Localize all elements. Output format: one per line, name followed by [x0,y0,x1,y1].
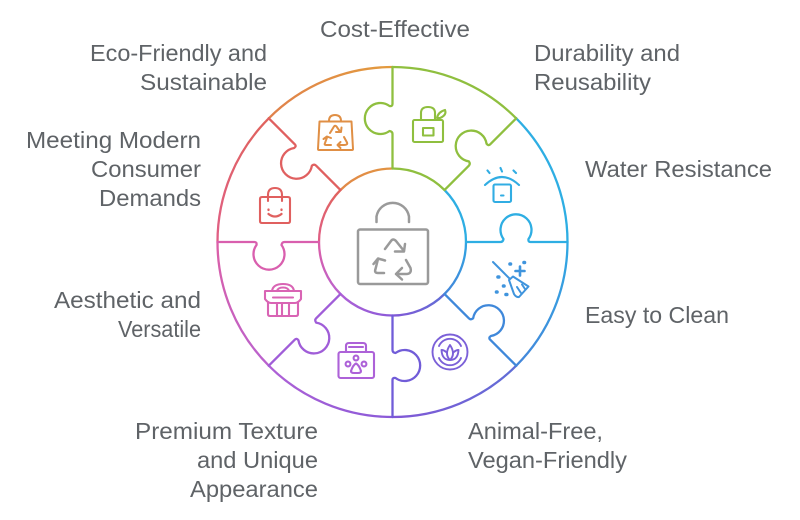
inner arc: premium texture piece [340,294,392,316]
label: meeting modern consumer demands: Consumer [91,156,201,182]
label: eco-friendly and sustainable: Eco-Friendly and [90,40,267,66]
outer arc: modern consumer piece [218,118,269,242]
icon: central recycling padlock bag [358,203,428,284]
label: water resistance: Water Resistance [585,156,772,182]
label: animal-free, vegan-friendly: Animal-Free, [468,418,603,444]
outer arc: aesthetic piece [218,242,269,366]
label: premium texture and unique appearance: Appearance [190,476,318,502]
outer and inner arc: water resistance piece [444,118,568,242]
label: premium texture and unique appearance: and Unique [197,447,318,473]
label: aesthetic and versatile: Aesthetic and [54,287,201,313]
inner arc: modern consumer piece [319,190,340,242]
label: meeting modern consumer demands: Meeting Modern [26,127,201,153]
label: durability and reusability [534,40,680,95]
label: durability and reusability: Reusability [534,69,652,95]
icon: water drops on bag [485,168,519,202]
puzzle joint top [365,67,392,168]
inner arc: aesthetic piece [319,242,340,294]
icon: satchel bag [265,284,301,316]
puzzle joint lower right [444,274,536,366]
icon: padlock bag with leaf [413,107,445,142]
puzzle joint right [466,214,568,242]
icon: paw print bag [338,343,374,378]
label: premium texture and unique appearance: Premium Texture [135,418,318,444]
label: premium texture and unique appearance [135,418,318,502]
label: animal-free, vegan-friendly [468,418,628,473]
puzzle joint upper left [249,118,341,210]
label: animal-free, vegan-friendly: Vegan-Friendly [468,447,628,473]
puzzle ring [218,67,568,417]
inner arc: easy to clean piece [444,242,466,294]
outer and inner arc: cost-effective piece [392,67,516,190]
icon: eco bag with recycling symbol [318,115,353,150]
label: eco-friendly and sustainable [90,40,267,95]
label: eco-friendly and sustainable: Sustainable [140,69,267,95]
inner arc: animal-free piece [392,294,444,316]
puzzle joint left [218,242,319,270]
label: cost-effective: Cost-Effective [320,16,470,42]
label: easy to clean: Easy to Clean [585,302,729,328]
label: durability and reusability: Durability and [534,40,680,66]
puzzle joint bottom [392,316,420,417]
outer arc: easy to clean piece [516,242,568,366]
outer arc: premium texture piece [269,366,392,417]
label: aesthetic and versatile: Versatile [118,316,201,342]
label: meeting modern consumer demands [26,127,201,211]
icon: broom with sparkles [493,262,528,297]
icon: lotus badge [432,334,468,370]
label: meeting modern consumer demands: Demands [99,185,201,211]
outer and inner arc: eco-friendly piece [269,67,392,190]
label: aesthetic and versatile [54,287,201,342]
puzzle joint upper right [425,99,516,190]
outer arc: animal-free piece [392,366,516,417]
puzzle joint lower left [269,294,360,385]
icon: smiling shopping bag [260,188,290,223]
